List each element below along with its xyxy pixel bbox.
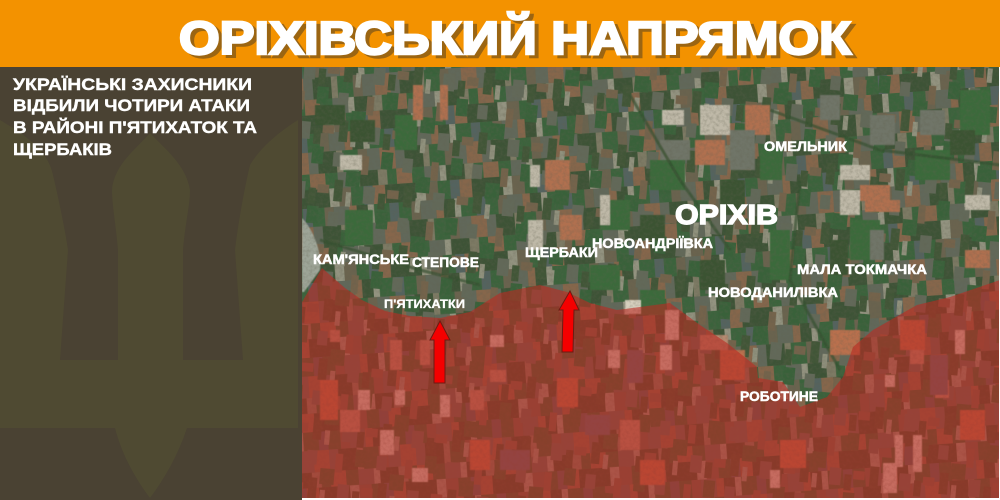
arrow: attack at Shcherbaky [559, 291, 579, 352]
map water: Kamianske shore [302, 218, 320, 292]
label: Мала Токмачка: МАЛА ТОКМАЧКА [797, 262, 927, 277]
icon: trident watermark [0, 120, 298, 498]
label: Новоданилівка: НОВОДАНИЛІВКА [708, 285, 838, 300]
title banner [0, 0, 1000, 67]
map fields: lower area [320, 300, 985, 493]
arrow: attack at Piatykhatky [430, 321, 450, 383]
summary text block: ВІДБИЛИ ЧОТИРИ АТАКИ [13, 97, 250, 115]
summary text block: В РАЙОНІ П'ЯТИХАТОК ТА [13, 118, 257, 137]
label: Степове: СТЕПОВЕ [412, 255, 479, 270]
label: П'ятихатки: П'ЯТИХАТКИ [384, 297, 465, 311]
label: Роботине: РОБОТИНЕ [740, 389, 818, 404]
texture grain over map [302, 67, 1000, 498]
panel: left background with trident emblem [0, 67, 302, 500]
label: Омельник: ОМЕЛЬНИК [764, 139, 848, 154]
summary text block [13, 76, 257, 159]
label: Оріхів: ОРІХІВ [675, 199, 778, 230]
label: Новоандріївка: НОВОАНДРІЇВКА [592, 236, 713, 251]
summary text block: ЩЕРБАКІВ [13, 141, 112, 159]
panel: satellite map [302, 67, 1000, 498]
map labels [313, 139, 927, 404]
map fields: upper area [302, 85, 1000, 370]
title: ОРІХІВСЬКИЙ НАПРЯМОК [179, 12, 852, 64]
label: Кам'янське: КАМ'ЯНСЬКЕ [313, 252, 409, 267]
red occupied territory overlay [302, 268, 1000, 498]
muted haze over fields [302, 67, 1000, 498]
summary text block: УКРАЇНСЬКІ ЗАХИСНИКИ [13, 76, 252, 94]
label: Щербаки: ЩЕРБАКИ [525, 245, 598, 260]
